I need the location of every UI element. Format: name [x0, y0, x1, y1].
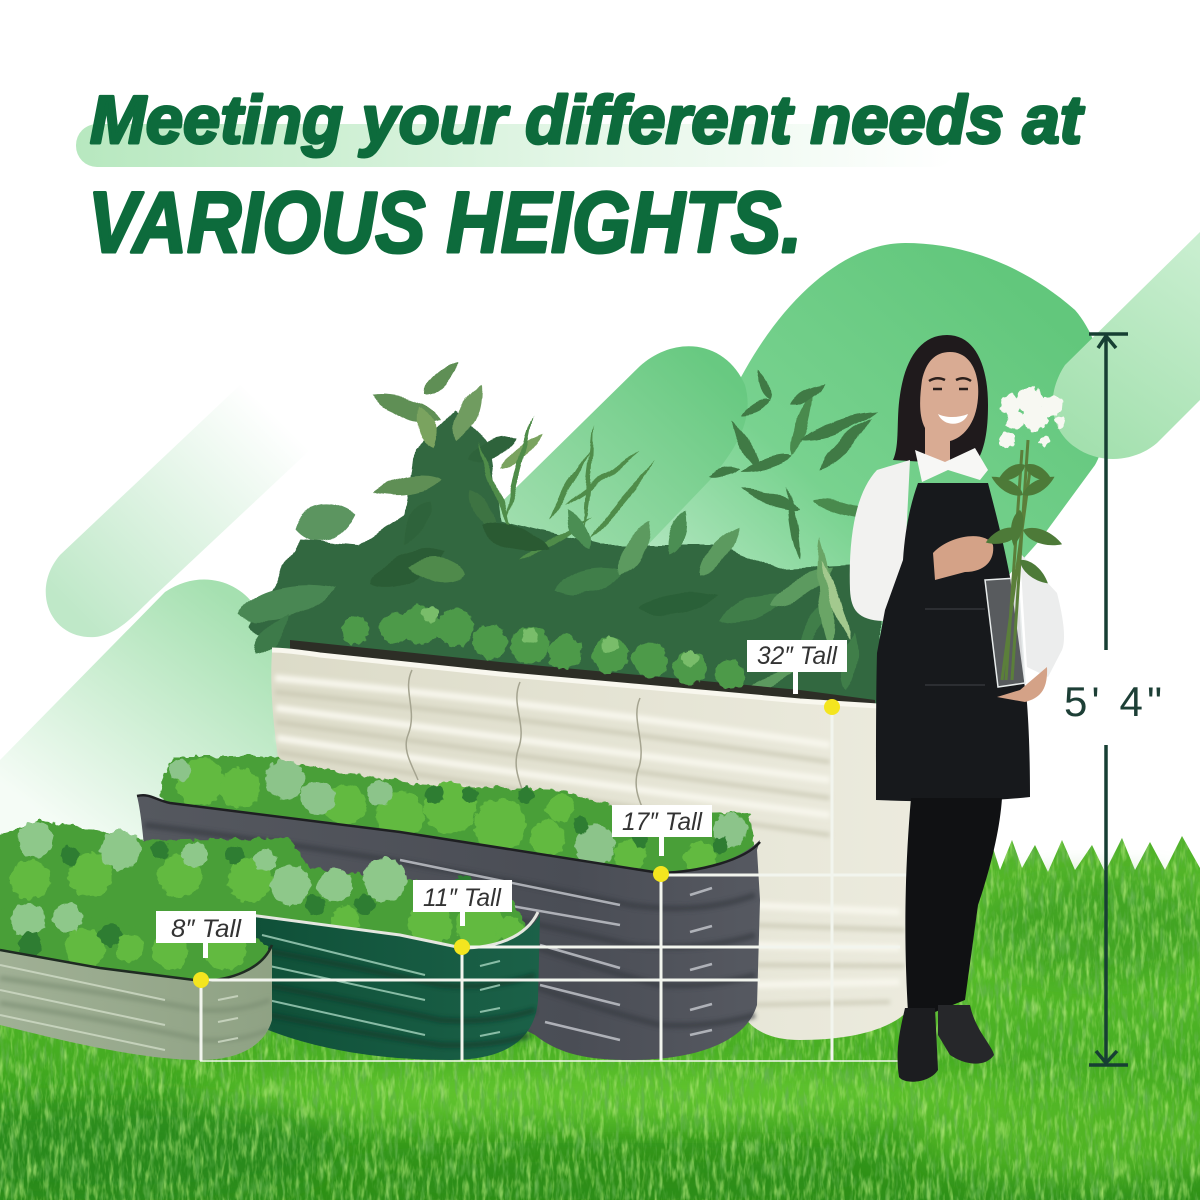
title line 2: VARIOUS HEIGHTS.	[88, 175, 802, 271]
strap leaves	[475, 414, 659, 563]
planter: 17 inch grey	[137, 795, 760, 1060]
right shoe	[938, 1005, 994, 1064]
glass vase	[985, 578, 1025, 687]
soil in cream bed	[290, 640, 875, 712]
monstera leaves	[231, 496, 552, 660]
height marker dots	[193, 699, 840, 988]
band: lower left	[0, 579, 320, 860]
band: large upper right	[560, 243, 1107, 720]
label: 11 inch	[413, 880, 512, 926]
hair	[893, 335, 988, 465]
lettuce in green bed	[0, 820, 526, 970]
rim	[0, 945, 272, 981]
ground cover in cream bed	[341, 605, 745, 690]
lower hand	[997, 667, 1047, 702]
label: 17 inch	[612, 805, 712, 856]
left shoe	[898, 1008, 938, 1082]
apron pocket line	[925, 609, 985, 685]
collar	[915, 448, 988, 482]
height text: 5' 4"	[1064, 678, 1162, 725]
plants in tall cream bed	[231, 356, 892, 720]
broad leaves	[552, 506, 863, 699]
seams	[406, 670, 645, 815]
lettuce in grey bed	[160, 756, 755, 890]
rim	[137, 795, 760, 873]
back palm tree	[708, 369, 892, 561]
band: middle	[310, 346, 748, 720]
face and neck	[920, 352, 978, 465]
grass lawn	[0, 830, 1200, 1200]
rim	[250, 912, 538, 948]
label: 17 inch: 17″ Tall	[622, 808, 703, 836]
apron	[876, 483, 1030, 801]
height dimension arrow	[1089, 334, 1128, 1065]
black leggings	[905, 798, 1002, 1012]
band: pale upper left	[46, 385, 310, 637]
fiddle tree leaves	[368, 356, 548, 549]
title	[88, 82, 1084, 271]
label: 8 inch: 8″ Tall	[171, 915, 242, 943]
hand on chest	[933, 536, 993, 580]
right shirt sleeve	[1020, 553, 1064, 677]
white flower heads	[999, 387, 1066, 449]
decorative green bands	[0, 232, 1200, 860]
planter: 32 inch cream	[271, 650, 920, 1040]
rim	[272, 650, 878, 706]
title line 1: Meeting your different needs at	[90, 82, 1084, 158]
left shirt sleeve	[850, 460, 934, 621]
title highlight pill	[76, 124, 956, 167]
woman	[850, 335, 1066, 1082]
lettuce in sage bed	[0, 903, 268, 995]
label: 8 inch	[156, 911, 256, 958]
foliage mass	[250, 410, 880, 720]
flower stems	[1002, 440, 1030, 680]
planter: 11 inch dark green	[250, 912, 540, 1060]
label: 11 inch: 11″ Tall	[423, 884, 502, 912]
flower foliage	[983, 460, 1064, 588]
label: 32 inch	[747, 640, 847, 694]
height measuring lines	[200, 707, 920, 1061]
smile	[938, 414, 968, 424]
planter: 8 inch sage	[0, 945, 272, 1060]
label: 32 inch: 32″ Tall	[757, 642, 838, 670]
eyes	[929, 378, 971, 389]
band: right	[1053, 232, 1200, 459]
